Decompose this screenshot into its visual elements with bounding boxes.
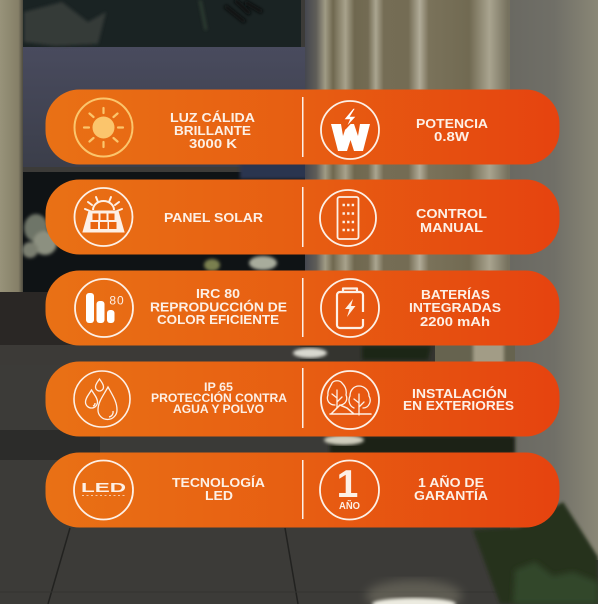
icon: battery — [321, 279, 379, 337]
icon: water drops — [74, 371, 130, 427]
text: control manual: CONTROL — [416, 206, 487, 221]
text: ip 65: AGUA Y POLVO — [173, 402, 264, 416]
icon: one year warranty — [320, 460, 379, 520]
text: instalacion — [403, 386, 514, 413]
icon: color rendering bars — [75, 279, 133, 337]
text: ip 65: PROTECCIÓN CONTRA — [151, 390, 287, 405]
text: baterias — [409, 287, 501, 329]
icon: led: LED — [81, 480, 126, 495]
panel: row 2 — [46, 180, 560, 254]
text: irc 80: IRC 80 — [196, 286, 240, 301]
text: irc 80: COLOR EFICIENTE — [157, 312, 279, 327]
text: baterias: BATERÍAS — [421, 287, 490, 302]
icon: color rendering bars: 80 — [109, 294, 125, 308]
text: luz cálida: LUZ CÁLIDA — [170, 110, 256, 125]
icon: warm sun — [74, 98, 132, 156]
panel: row 5 — [46, 452, 560, 528]
text: luz cálida: 3000 K — [189, 136, 238, 151]
panel: row 1 — [46, 90, 560, 164]
text: potencia: POTENCIA — [416, 116, 489, 131]
text: panel solar: PANEL SOLAR — [164, 210, 264, 225]
icon: led — [74, 460, 133, 520]
text: irc 80 — [150, 286, 287, 327]
icon: remote control — [320, 190, 376, 246]
panel: row 4 — [46, 362, 560, 436]
text: control manual — [416, 206, 487, 235]
text: potencia — [416, 116, 489, 144]
text: tecnologia led: LED — [205, 488, 233, 503]
panel: row 3 — [46, 270, 560, 346]
text: garantia: GARANTÍA — [414, 488, 489, 503]
icon: one year warranty: AÑO — [339, 499, 360, 512]
icon: one year warranty: 1 — [337, 463, 358, 506]
icon: watt bolt — [321, 101, 379, 159]
text: garantia: 1 AÑO DE — [418, 475, 484, 490]
text: tecnologia led — [172, 475, 266, 503]
text: potencia: 0.8W — [434, 129, 470, 144]
text: irc 80: REPRODUCCIÓN DE — [150, 300, 287, 314]
icon: solar panel — [74, 188, 132, 246]
text: luz cálida: BRILLANTE — [174, 123, 251, 138]
text: baterias: INTEGRADAS — [409, 300, 501, 315]
text: tecnologia led: TECNOLOGÍA — [172, 475, 266, 490]
text: luz cálida — [170, 110, 256, 151]
floor — [0, 292, 440, 354]
text: ip 65 — [151, 380, 287, 416]
text: garantia — [414, 475, 489, 503]
text: instalacion: INSTALACIÓN — [412, 386, 507, 401]
text: ip 65: IP 65 — [204, 380, 233, 394]
text: baterias: 2200 mAh — [420, 314, 490, 329]
text: instalacion: EN EXTERIORES — [403, 398, 514, 413]
text: control manual: MANUAL — [420, 220, 483, 235]
icon: outdoor trees — [321, 371, 379, 429]
